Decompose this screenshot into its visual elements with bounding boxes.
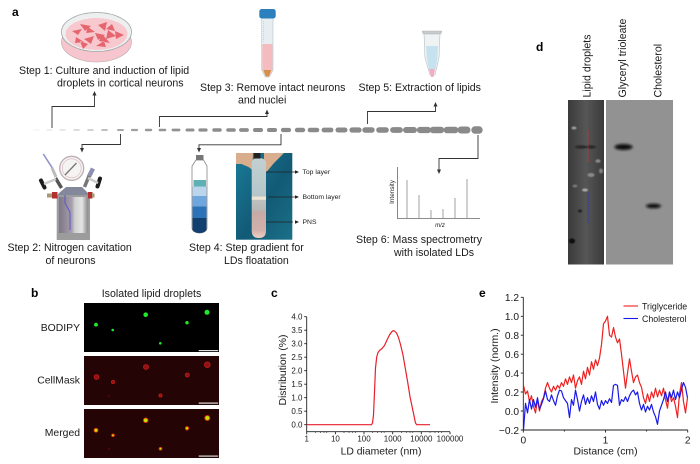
chart: LD size distribution: 100000 (437, 434, 464, 444)
arrow: to step 4 (197, 134, 281, 152)
text: step 2: Step 2: Nitrogen cavitation (8, 242, 132, 254)
chart: TLC intensity profiles: 0.2 (505, 388, 519, 399)
chart: LD size distribution: 3.5 (291, 326, 303, 335)
chart: TLC intensity profiles: 0.8 (505, 331, 519, 342)
chart: mass spectrum icon: m/z (435, 223, 445, 229)
icon: culture dish with neurons (62, 12, 132, 62)
lane labels: Glyceryl trioleate (617, 19, 629, 98)
text: step 1: droplets in cortical neurons (57, 78, 184, 90)
chart: LD size distribution (278, 312, 464, 458)
row labels: Merged (45, 428, 80, 439)
chart: LD size distribution: 1.5 (291, 380, 303, 389)
chart: LD size distribution: Distribution (%) (278, 334, 289, 406)
labels: layers in photo (266, 169, 341, 226)
chart: TLC intensity profiles: 0.4 (505, 369, 519, 380)
text: step 4: LDs floatation (224, 255, 289, 267)
chart: LD size distribution: 3.0 (291, 340, 303, 348)
arrow: to step 5 (368, 102, 438, 124)
arrow: to step 3 (160, 110, 269, 127)
chart: TLC intensity profiles: −0.2 (499, 426, 519, 437)
arrow: to step 6 (437, 135, 478, 174)
legend: Cholesterol (642, 314, 687, 324)
chart: LD size distribution: 1.0 (291, 394, 303, 402)
chart: LD size distribution: 0.5 (291, 407, 303, 416)
arrow: to step 1 (52, 91, 96, 128)
text: step 6: Step 6: Mass spectrometry (356, 234, 482, 246)
chart: LD size distribution: 2.0 (291, 366, 303, 376)
icon: microcentrifuge tube (422, 31, 442, 77)
icon: gradient tube (192, 155, 207, 233)
micrograph: BODIPY (84, 303, 219, 352)
icon: conical tube (259, 9, 276, 77)
chart: LD size distribution: 1000 (384, 434, 402, 444)
image: standards TLC lanes (606, 100, 673, 264)
panel label a: a (12, 5, 19, 19)
micrograph: merged (84, 409, 219, 458)
panel label d: d (536, 40, 543, 54)
heading: isolated lipid droplets: Isolated lipid droplets (102, 288, 201, 300)
chart: TLC intensity profiles: 0.6 (505, 350, 519, 361)
chart: LD size distribution: 2.5 (291, 353, 303, 362)
lane labels: Lipid droplets (582, 34, 594, 98)
series: triglyceride (524, 316, 688, 418)
chart: TLC intensity profiles: 0.0 (505, 407, 519, 418)
chart: mass spectrum icon: Intensity (389, 179, 396, 204)
row labels: CellMask (37, 376, 81, 386)
arrow: to step 2 (80, 134, 120, 152)
labels: layers in photo: Top layer (302, 169, 331, 176)
chart: LD size distribution: 4.0 (291, 312, 303, 322)
chart: TLC intensity profiles: Intensity (norm.) (490, 328, 501, 404)
text: step 6: with isolated LDs (393, 247, 474, 259)
text: step 3: Step 3: Remove intact neurons (200, 82, 345, 94)
panel label e: e (479, 286, 486, 300)
chart: LD size distribution: 10 (331, 434, 340, 444)
chart: TLC intensity profiles (490, 293, 691, 458)
chart: TLC intensity profiles: Distance (cm) (573, 446, 638, 458)
chart: LD size distribution: LD diameter (nm) (341, 446, 421, 458)
chart: TLC intensity profiles: 2 (685, 436, 691, 446)
chart: LD size distribution: 1 (304, 434, 309, 444)
labels: layers in photo: PNS (302, 219, 317, 226)
chart: TLC intensity profiles: 1.0 (505, 312, 519, 323)
chart: TLC intensity profiles: 1 (603, 436, 609, 446)
photo: centrifuge tube with layers (236, 153, 292, 240)
chart: LD size distribution: 10000 (410, 434, 433, 444)
row labels: BODIPY (41, 323, 80, 334)
text: step 4: Step 4: Step gradient for (189, 242, 304, 254)
chart: TLC intensity profiles: 0 (520, 436, 526, 446)
text: step 3: and nuclei (238, 94, 286, 106)
image: lipid droplets TLC lane (568, 100, 604, 264)
chart: TLC intensity profiles: 1.2 (505, 293, 519, 304)
lane labels: Cholesterol (652, 44, 664, 98)
lane labels (582, 19, 664, 98)
text: step 5: Step 5: Extraction of lipids (358, 82, 481, 94)
text: step 2: of neurons (46, 255, 96, 267)
chart: LD size distribution: 100 (357, 434, 371, 444)
row labels (37, 323, 81, 439)
legend: Triglyceride (642, 302, 687, 312)
labels: layers in photo: Bottom layer (302, 194, 341, 201)
timeline: dashed progression line (34, 129, 479, 131)
text: step 1: Step 1: Culture and induction of lipid (19, 65, 189, 77)
icon: nitrogen cavitation chamber (41, 154, 100, 240)
chart: LD size distribution: 0.0 (291, 420, 303, 430)
panel label c: c (271, 286, 278, 300)
series: cholesterol (524, 383, 688, 430)
panel label b: b (31, 286, 38, 300)
legend (624, 302, 687, 324)
micrograph: CellMask (84, 356, 219, 405)
chart: mass spectrum icon (389, 167, 480, 229)
